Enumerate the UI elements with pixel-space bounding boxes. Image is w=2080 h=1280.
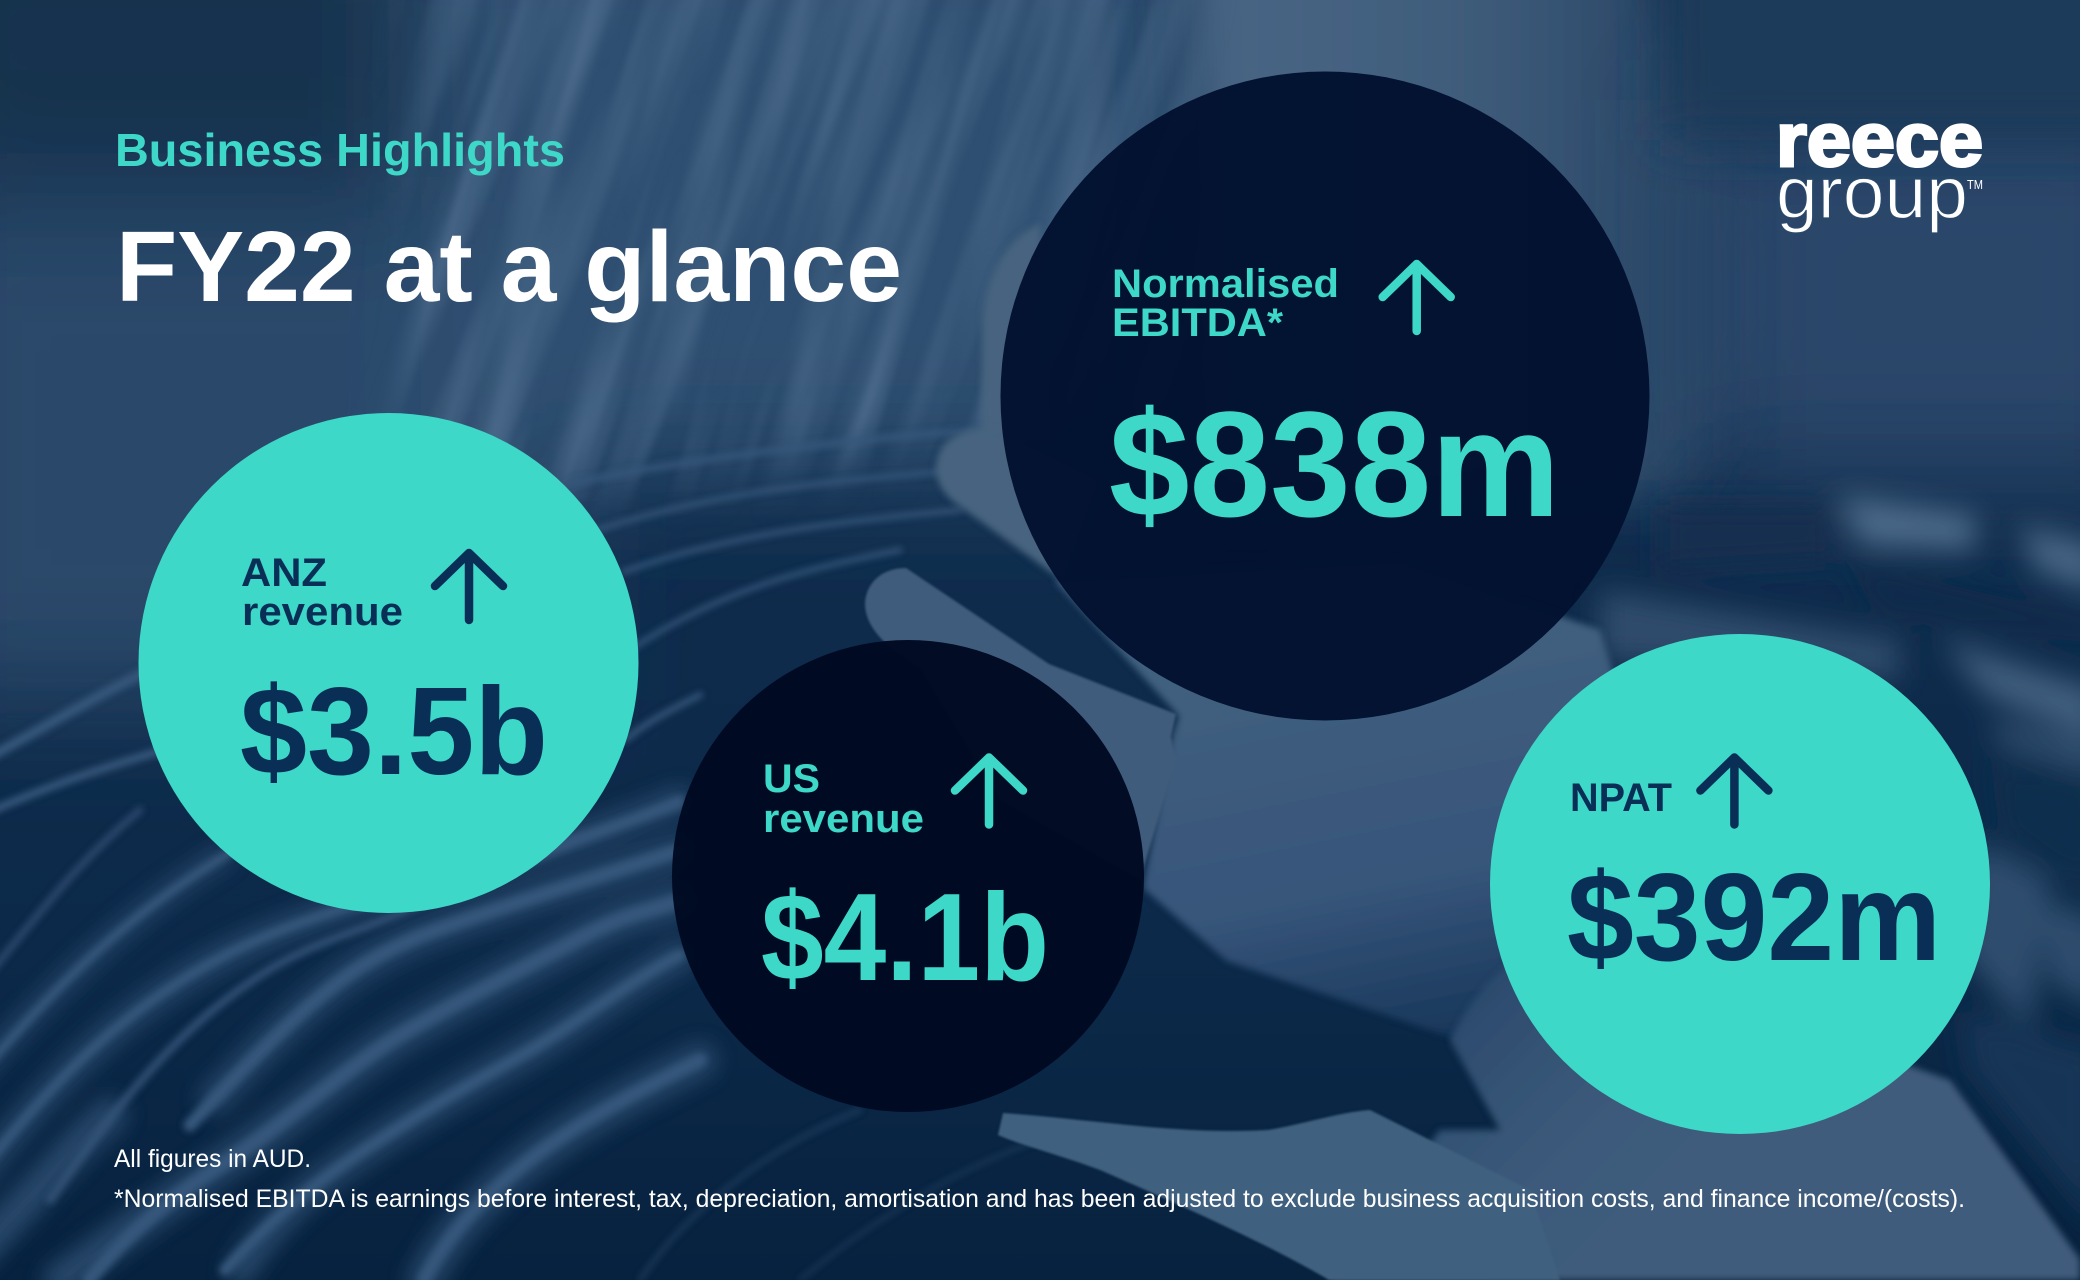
panel: Normalised EBITDA [1000,72,1650,720]
circle background [1490,634,1990,1134]
arrow up [955,758,1023,824]
label: US revenue [763,757,924,841]
circle background [138,413,638,913]
footnote: *Normalised EBITDA is earnings before interest, tax, depreciation, amortisation and has been adjusted to exclude business acquisition costs, and finance income/(costs). [114,1185,1965,1213]
panel: NPAT [1490,634,1990,1134]
value: $4.1b: $4.1b [761,869,1049,1007]
label: Normalised EBITDA*: EBITDA* [1112,301,1283,345]
logo: reece group: reece [1776,98,1983,183]
label: NPAT: NPAT [1570,776,1672,820]
arrow up [435,553,503,620]
value: $838m: $838m [1109,380,1560,548]
footnote [114,1145,1965,1213]
label: ANZ revenue: revenue [242,590,403,634]
label: ANZ revenue [241,551,403,634]
label: Normalised EBITDA* [1112,262,1339,345]
title: FY22 at a glance: FY22 at a glance [116,211,902,323]
label: Normalised EBITDA*: Normalised [1112,262,1339,306]
logo: reece group: group [1776,153,1968,234]
heading: Business Highlights: Business Highlights [115,124,565,176]
circle background [1000,72,1650,720]
logo: reece group [1776,98,1983,234]
hand [865,224,2080,1280]
logo: reece group: TM [1967,177,1983,192]
arrow up [1700,758,1768,824]
hair texture [399,0,1190,500]
panel: ANZ revenue [138,413,638,913]
right side blurred coil [1600,495,2080,1230]
label: US revenue: US [763,757,820,801]
palm [1054,560,1640,1060]
label: ANZ revenue: ANZ [241,551,327,595]
value: $3.5b: $3.5b [240,663,548,801]
circle background [672,640,1144,1112]
value: $392m: $392m [1567,849,1941,987]
arrow up [1383,264,1451,331]
panel: US revenue [672,640,1144,1112]
footnote: All figures in AUD. [114,1145,311,1173]
label: US revenue: revenue [763,797,924,841]
cable arcs: wide soft glow [0,800,700,1280]
cable arcs: highlights [0,430,1040,1280]
